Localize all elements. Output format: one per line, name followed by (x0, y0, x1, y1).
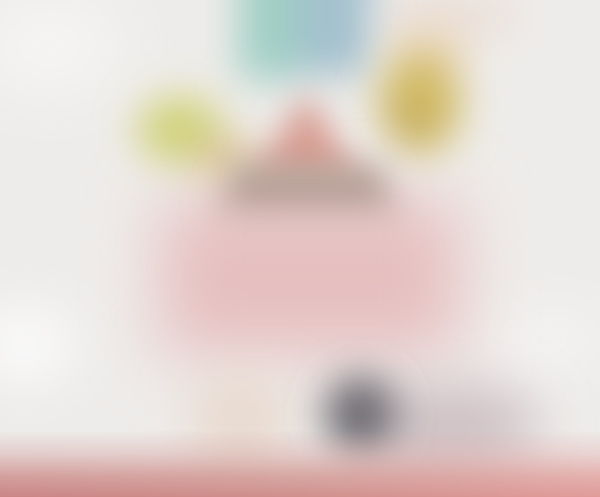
panel: bottom band (0, 430, 600, 497)
icon: left yellow-green balloon (136, 96, 264, 182)
panel: grey-pink block right (360, 385, 540, 465)
panel: cream block (190, 376, 290, 464)
icon: dark circular emblem (324, 376, 396, 452)
icon: pink triangle (250, 92, 362, 180)
panel: pink main block (160, 200, 460, 355)
heading band: dark tan bar (215, 168, 400, 217)
panel: teal top block (238, 0, 370, 80)
icon: right yellow balloon (378, 31, 468, 154)
